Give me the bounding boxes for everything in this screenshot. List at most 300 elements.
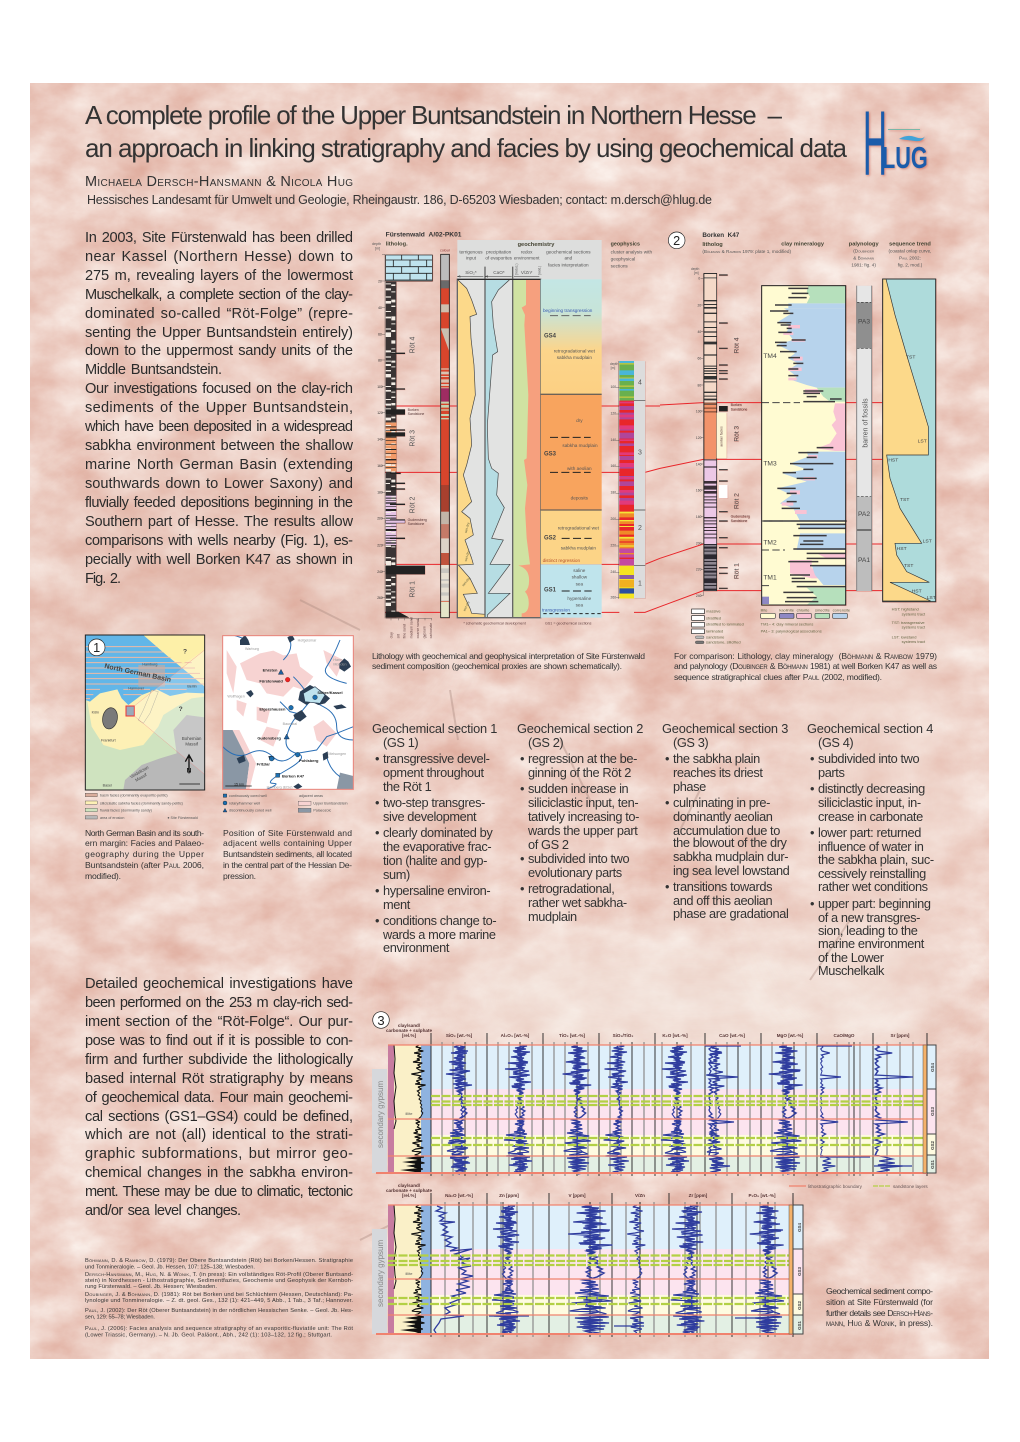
text: geochemical section 1: the Röt 1	[383, 779, 432, 794]
text: geochemical section 1: environment	[383, 940, 450, 955]
chart: geochemical logs, lower row	[372, 1183, 803, 1337]
facies interpretation column: beginning transgression	[543, 308, 593, 313]
lithology column: Röt 2	[734, 493, 741, 509]
section strip: GS1–GS4: GS3	[930, 1106, 935, 1116]
figure 1: palaeogeography map: Basel	[103, 784, 112, 788]
text: geochemical section 2: rather wet sabkha-	[528, 895, 627, 910]
caption: map 2	[223, 828, 352, 881]
geochemistry chart	[457, 240, 602, 625]
text: geochemical section 2: •	[520, 881, 524, 896]
boundary lines	[376, 1205, 793, 1334]
intro text block: dominated so-called “Röt-Folge” (repre-	[85, 306, 353, 322]
facies interpretation column: GS4	[544, 333, 557, 339]
heading: depth	[372, 242, 381, 246]
figure 1: palaeogeography map: North German Basin	[104, 663, 172, 684]
geochemistry chart: V/Zn*	[521, 270, 533, 275]
intro text block: near Kassel (Northern Hesse) down to	[85, 249, 353, 265]
lithology column: Borken	[731, 403, 742, 407]
caption: Borken K47	[674, 651, 937, 682]
column headings: V/Zn	[635, 1193, 645, 1198]
facies interpretation column: saline	[573, 568, 586, 573]
depth axis: 180	[696, 515, 702, 519]
heading: palynology	[849, 241, 879, 247]
column headings: carbonate + sulphate	[386, 1028, 432, 1033]
caption: map 1: modified).	[85, 871, 121, 881]
section strip: GS1–GS4	[789, 1205, 803, 1334]
heading: Fürstenwald A/02-PK01	[386, 232, 462, 239]
caption: geochemical sediment composition: sition at Site Fürstenwald (for	[826, 1297, 933, 1307]
column headings: TiO₂ [wt.-%]	[559, 1033, 585, 1038]
depth axis: 120	[696, 436, 702, 440]
legend: lithology and minerals: TST: transgressive	[892, 620, 925, 625]
text: geochemical section 1: transgressive devel-	[383, 751, 490, 766]
geophysics cluster column: 2	[638, 525, 642, 532]
facies interpretation column: GS2	[544, 535, 557, 541]
grid lines	[445, 1202, 775, 1337]
lithology column	[704, 273, 750, 591]
heading	[372, 232, 462, 252]
figure 1: well location map: 15 km	[234, 782, 244, 786]
legend: map 2: continuously cored well	[229, 794, 267, 798]
section strip: GS1–GS4: GS1	[930, 1159, 935, 1169]
clay mineralogy chart	[762, 286, 847, 605]
references: Doubinger, J. & Böhmann, D. (1981): Röt bei Borken und bei Schlüchtern (Hessen, Deutschland): Pa-	[85, 1292, 353, 1298]
legend: map 2: rotary/hammer well	[229, 801, 260, 805]
depth axis: 140	[377, 438, 383, 442]
palynology column: barren of fossils	[862, 398, 869, 448]
text: geochemical section 3: culminating in pre-	[673, 795, 770, 810]
intro text block	[84, 230, 353, 587]
legend: map 2: discontinuously cored well	[229, 809, 272, 813]
text: geochemical section 4: rather wet conditions	[818, 879, 928, 894]
sequence trend chart: HST	[897, 546, 907, 552]
text: geochemical section 1: •	[375, 883, 379, 898]
curves	[446, 1045, 913, 1174]
text: geochemical section 4: •	[810, 896, 814, 911]
background bands	[431, 1045, 927, 1173]
lithology labels: coarse sand	[416, 619, 420, 638]
figure 1: well location map: Pohlsberg	[299, 758, 319, 763]
column headings: SiO₂/TiO₂	[613, 1033, 633, 1038]
well symbols	[269, 669, 317, 777]
text: geochemical section 2: (GS 2)	[528, 735, 563, 750]
geochemistry chart: terrigenous	[459, 250, 483, 255]
column headings: [rel.%]	[402, 1193, 416, 1198]
text: geochemical section 1: ment	[383, 897, 411, 912]
figure 1: well location map: Söhre/Kassel	[317, 690, 343, 695]
sequence trend chart: HST	[888, 457, 898, 463]
sequence trend chart: TST	[900, 497, 909, 503]
text: geochemical section 4: of a new transgres-	[818, 910, 920, 925]
geochemistry chart: redox	[521, 250, 533, 255]
section strip: GS1–GS4	[923, 1045, 936, 1173]
lithology labels: Sandstone	[408, 522, 424, 526]
geochemistry chart: wet-dry	[462, 600, 471, 612]
depth axis: 160	[696, 488, 702, 492]
lithology column: Sandstone	[731, 519, 747, 523]
text: geochemical section 4: upper part: beginning	[818, 896, 931, 911]
figure 1: palaeogeography map: ?	[179, 706, 183, 713]
depth axis: 60	[697, 357, 701, 361]
logo: HLUG: H	[863, 91, 887, 195]
text: geochemical section 2	[517, 721, 643, 924]
text: geochemical section 2: of GS 2	[528, 837, 569, 852]
intro text block: Fig. 2.	[85, 571, 121, 587]
column headings	[386, 1183, 776, 1198]
section strip: GS1–GS4: GS1	[797, 1320, 802, 1330]
figure 1: palaeogeography map: Massif	[185, 741, 199, 746]
side label: secondary gypsum: secondary gypsum	[376, 1240, 385, 1307]
side label: secondary gypsum: secondary gypsum	[376, 1081, 385, 1148]
depth axis: 260	[377, 596, 383, 600]
intro text block: Middle Buntsandstein.	[85, 362, 222, 378]
sequence trend chart: LST	[927, 595, 936, 601]
geophysics cluster column: 200	[611, 517, 616, 521]
text: geochemical section 1: Geochemical section 1	[372, 721, 497, 736]
text: geochemical section 3: •	[665, 751, 669, 766]
geophysics cluster column: geophysical	[611, 257, 635, 262]
affiliation and contact: Hessisches Landesamt für Umwelt und Geologie, Rheingaustr. 186, D-65203 Wiesbaden; contact: m.dersch@hlug.de	[87, 193, 712, 207]
column headings: carbonate + sulphate	[386, 1188, 432, 1193]
geophysics cluster column: 220	[611, 543, 616, 547]
heading: colour	[440, 248, 451, 252]
column headings: Na₂O [wt.-%]	[445, 1193, 473, 1198]
title	[85, 100, 848, 163]
figure: Fürstenwald profile	[372, 232, 660, 638]
figure 1: well location map: Hofgeismar	[298, 639, 317, 643]
clay mineralogy chart: TM3	[763, 460, 777, 467]
text: geochemical section 2: Geochemical section 2	[517, 721, 643, 736]
depth axis: 100	[377, 385, 383, 389]
geochemistry chart: environment	[514, 256, 540, 261]
intro text block: sediments of the Upper Buntsandstein,	[85, 400, 353, 416]
clay mineralogy chart: TM2	[763, 540, 777, 547]
figure 1: well location map: Wolfhagen	[227, 694, 245, 698]
intro text block: down to the uppermost sandy units of the	[85, 343, 353, 359]
text: geochemical section 2: evolutionary parts	[528, 865, 622, 880]
figure: Borken K47 profile	[660, 232, 936, 645]
lithology labels	[386, 337, 433, 638]
depth axis: 0	[698, 277, 700, 281]
second text block: based internal Röt stratigraphy by means	[85, 1071, 353, 1087]
side label: secondary gypsum	[372, 1229, 387, 1334]
figure 1: palaeogeography map: Vindelician	[129, 764, 150, 779]
text: geochemical section 3: phase are gradational	[673, 906, 788, 921]
facies interpretation column: retrogradational wet	[554, 348, 596, 353]
text: geochemical section 3: dominantly aeolian	[673, 809, 773, 824]
text: geochemical section 1: •	[375, 751, 379, 766]
intro text block: 275 m, revealing layers of the lowermost	[85, 268, 353, 284]
sequence trend chart: TST	[906, 354, 915, 360]
references: Paul, J. (2002): Der Röt (Oberer Buntsandstein) in der nördlichen Hessischen Senke. – Geol. Jb. Hes-	[85, 1308, 353, 1314]
chart legend: sandstone layers	[893, 1184, 928, 1189]
legend: lithology and minerals: sandstone	[706, 635, 725, 640]
text: geochemical section 2: ginning of the Röt 2	[528, 765, 631, 780]
facies interpretation column: sabkha mudplain	[561, 546, 596, 551]
legend: lithology and minerals: sandstone, silicified	[706, 640, 741, 645]
caption: map 1: ern margin: Facies and Palaeo-	[85, 838, 204, 848]
heading: fig. 2, mod.)	[898, 262, 923, 267]
legend: map 1: ● Site Fürstenwald	[167, 816, 198, 820]
heading: (Doubinger	[853, 248, 875, 253]
facies interpretation column: hypersaline	[567, 596, 592, 601]
legend: lithology and minerals: LST: lowstand	[892, 634, 916, 639]
references: sen, 129: 55–78; Wiesbaden.	[85, 1314, 155, 1320]
second text block: ment. These may be due to climatic, tectonic	[85, 1184, 353, 1200]
text: geochemical section 1: two-step transgres-	[383, 795, 485, 810]
lithology labels: clay	[389, 632, 393, 638]
column headings: clay/sand/	[398, 1183, 421, 1188]
facies interpretation column: shallow	[572, 575, 588, 580]
text: geochemical section 1	[372, 721, 497, 955]
text: geochemical section 2: sudden increase in	[528, 781, 629, 796]
references: rung Fürstenwald. – Geol. Jb. Hessen; Wiesbaden.	[85, 1284, 217, 1290]
column headings: SiO₂ [wt.-%]	[446, 1033, 473, 1038]
legend: lithology and minerals: systems tract	[902, 639, 926, 644]
sequence trend chart: TST	[904, 563, 913, 569]
lithology labels: Röt 1	[409, 581, 416, 598]
text: geochemical section 4: Geochemical section 4	[807, 721, 933, 736]
text: geochemical section 4: •	[810, 751, 814, 766]
references: Böhmann, D. & Rambow, D. (1979): Der Obere Buntsandstein (Röt) bei Borken/Hessen. Stratigraphie	[85, 1258, 353, 1264]
geochemistry chart: geochemical sections	[546, 250, 591, 255]
text: geochemical section 4: parts	[818, 765, 844, 780]
facies interpretation column: distinct regression	[543, 558, 581, 563]
text: geochemical section 1: •	[375, 795, 379, 810]
text: geochemical section 2: tatively increasing to-	[528, 809, 639, 824]
side label: secondary gypsum	[372, 1069, 387, 1173]
geochemistry chart: CaO*	[493, 270, 505, 275]
legend: lithology and minerals: laminated	[706, 628, 723, 633]
geophysics cluster column: 4	[638, 380, 642, 387]
caption: map 2: Buntsandstein sediments, all located	[223, 849, 352, 859]
depth axis: 80	[697, 383, 701, 387]
lithology labels: medium sand	[409, 617, 413, 638]
geophysics cluster column: 1	[638, 580, 642, 587]
text: geochemical section 3: ing sea level lowstand	[673, 863, 790, 878]
references: stein) in Nordhessen - Lithostratigraphie, Sedimentfazies, Geochemie und Geophysik der Kernboh-	[85, 1278, 353, 1284]
depth axis: 200	[377, 517, 383, 521]
heading: litholog.	[386, 242, 408, 248]
text: geochemical section 3: Geochemical section 3	[662, 721, 788, 736]
figure 1: palaeogeography map: Massif	[134, 772, 148, 783]
palynology column: PA3	[858, 319, 870, 326]
depth axis: 200	[696, 542, 702, 546]
text: geochemical section 4: cessively reinstalling	[818, 866, 926, 881]
text: geochemical section 4: crease in carbonate	[818, 809, 923, 824]
lithology column	[386, 255, 432, 618]
text: geochemical section 1: conditions change to-	[383, 913, 496, 928]
figure 1: palaeogeography map: ?	[183, 648, 187, 655]
figure 1: well location map: Warburg	[245, 647, 259, 651]
text: geochemical section 4: Muschelkalk	[818, 963, 885, 978]
heading	[702, 232, 931, 267]
legend: map 1: siliciclastic sabkha facies (dominantly sandy-pelitic)	[100, 801, 183, 805]
depth axis: 40	[697, 330, 701, 334]
palynology column: PA2	[858, 511, 870, 518]
stacked composition column: illite	[406, 1111, 413, 1116]
text: geochemical section 4: lower part: returned	[818, 825, 921, 840]
text: geochemical section 3: •	[665, 879, 669, 894]
lithology column: Sandstone	[731, 408, 747, 412]
figure 1: palaeogeography map	[84, 634, 206, 820]
caption: geochemical sediment composition: Geochemical sediment compo-	[826, 1286, 933, 1296]
lithology labels: Sandstone	[408, 412, 424, 416]
text: geochemical section 1: wards a more marine	[382, 927, 496, 942]
column headings: K₂O [wt.-%]	[662, 1033, 688, 1038]
geochemistry chart: (reduc.)	[514, 264, 518, 275]
geophysics cluster column: cluster analysis with	[611, 250, 652, 255]
text: geochemical section 4: marine environment	[818, 936, 925, 951]
text: geochemical section 4: subdivided into two	[818, 751, 920, 766]
text: geochemical section 4: siliciclastic input, in-	[818, 795, 921, 810]
legend: map 2: Palaeozoic	[313, 809, 331, 813]
figure 1: palaeogeography map: Hamburg	[142, 663, 157, 667]
caption: Fürstenwald profile: Lithology with geochemical and geophysical interpretation of Site Fürstenwald	[372, 651, 645, 661]
figure 1: well location map: Ehrsten	[263, 668, 278, 673]
lithology column: Röt 3	[734, 425, 741, 442]
figure 1: palaeogeography map: N	[187, 768, 192, 775]
geophysics cluster column: sections	[611, 264, 628, 269]
depth axis	[691, 267, 703, 598]
clay mineralogy chart: TM4	[763, 353, 777, 360]
column headings	[386, 1023, 910, 1038]
second text block	[84, 976, 354, 1219]
legend: lithology and minerals: massive	[706, 609, 721, 614]
lithology labels: carbonate	[429, 623, 433, 638]
heading: 1981: fig. 4)	[851, 262, 876, 267]
geochemistry chart: input	[466, 256, 477, 261]
geochemistry chart: wet-dry	[464, 522, 471, 534]
geochemistry chart: geochemistry	[518, 242, 555, 248]
correlation lines	[385, 406, 660, 612]
geophysics cluster column: 160	[611, 464, 616, 468]
caption: geochemical sediment composition: mann, Hug & Wonik, in press).	[826, 1318, 933, 1328]
geochemistry chart: (oxid.)	[538, 266, 542, 275]
caption: map 2: Position of Site Fürstenwald and	[223, 828, 352, 838]
geochemistry chart: SiO₂*	[465, 270, 477, 275]
figure 1: palaeogeography map: Frankfurt	[101, 739, 116, 743]
depth axis: 220	[696, 568, 702, 572]
intro text block: Muschelkalk, a complete section of the clay-	[85, 287, 353, 303]
intro text block: pecially with well Borken K47 as shown in	[85, 552, 353, 568]
text: geochemical section 1: sum)	[383, 867, 410, 882]
caption: Fürstenwald profile: sediment composition (geochemical proxies are shown schematically).	[372, 661, 622, 671]
clay mineralogy chart: TM1	[763, 574, 777, 581]
text: geochemical section 3: phase	[673, 779, 706, 794]
figure 1: palaeogeography map: Hannover	[128, 686, 145, 690]
logo: HLUG	[863, 91, 928, 195]
heading: clay mineralogy	[781, 241, 825, 247]
heading: Paul 2002:	[899, 255, 921, 260]
depth axis: 40	[378, 306, 382, 310]
depth axis: 240	[696, 594, 702, 598]
sequence trend chart: HST	[912, 588, 922, 594]
authors: Michaela Dersch-Hansmann & Nicola Hug	[85, 174, 353, 190]
text: geochemical section 3: sabkha mudplain dur-	[673, 849, 788, 864]
geochemistry chart: wet-dry	[464, 550, 471, 562]
legend: lithology and minerals: TM1– 4: clay mineral sections	[761, 622, 813, 627]
caption: map 2: in the central part of the Hessian De-	[223, 860, 352, 870]
second text block: chemical changes in the sabkha environ-	[85, 1165, 353, 1181]
text: geochemical section 2: mudplain	[528, 909, 577, 924]
legend: lithology and minerals: illite	[761, 607, 768, 612]
section strip: GS1–GS4: GS4	[797, 1222, 802, 1232]
intro text block: comparisons with wells nearby (Fig. 1), es-	[85, 533, 353, 549]
text: geochemical section 4: influence of water in	[818, 839, 924, 854]
geochemistry chart: wet-dry	[461, 576, 471, 587]
text: geochemical section 3: (GS 3)	[673, 735, 708, 750]
stacked composition column	[388, 1045, 431, 1173]
section strip: GS1–GS4: GS2	[930, 1140, 935, 1150]
geophysics cluster column: 120	[611, 411, 616, 415]
caption: map 1	[85, 828, 204, 881]
geophysics cluster column: depth	[610, 362, 618, 366]
lithology labels: Röt 2	[409, 497, 416, 513]
section strip: GS1–GS4: GS4	[930, 1062, 935, 1072]
depth axis: 160	[377, 464, 383, 468]
second text block: graphic subformations, but mirror geo-	[85, 1146, 353, 1162]
text: geochemical section 3: and off this aeolian	[673, 893, 772, 908]
intro text block: In 2003, Site Fürstenwald has been drilled	[85, 230, 353, 246]
text: geochemical section 1: •	[375, 825, 379, 840]
text: geochemical section 4: the sabkha plain, suc-	[818, 852, 934, 867]
text: geochemical section 4: (GS 4)	[818, 735, 853, 750]
section strip: GS1–GS4: GS2	[797, 1300, 802, 1310]
second text block: been performed on the 253 m clay-rich sed-	[85, 995, 353, 1011]
palynology column	[857, 286, 872, 591]
facies interpretation column: deposits	[571, 496, 589, 501]
figure 1: palaeogeography map: Köln	[92, 710, 99, 714]
geophysics cluster column: [m]	[611, 366, 615, 370]
legend: lithology and minerals: smectite	[815, 607, 831, 612]
caption: map 1: Buntsandstein (after Paul 2006,	[85, 860, 204, 870]
second text block: pose was to find out if it is possible to con-	[85, 1033, 353, 1049]
intro text block: Our investigations focused on the clay-rich	[85, 381, 353, 397]
figure number: 2	[673, 234, 680, 248]
lithology column: Gudensberg	[731, 515, 750, 519]
lithology column: aeolian facies	[720, 426, 724, 447]
text: geochemical section 3: accumulation due to	[673, 823, 780, 838]
depth axis: 240	[377, 570, 383, 574]
geochemistry chart: precipitation	[486, 250, 512, 255]
depth axis: 120	[377, 411, 383, 415]
heading: litholog	[702, 242, 723, 248]
geophysics cluster column: 180	[611, 491, 616, 495]
lithology labels: Röt 3	[409, 430, 416, 447]
lithology labels: Gudensberg	[408, 518, 427, 522]
geophysics cluster column: 260	[611, 596, 616, 600]
references: und Tonmineralogie. – Geol. Jb. Hessen, 107: 125–138; Wiesbaden.	[85, 1264, 255, 1270]
intro text block: senting the Upper Buntsandstein entirely)	[85, 325, 353, 341]
text: geochemical section 1: •	[375, 913, 379, 928]
depth axis: 20	[697, 303, 701, 307]
text: geochemical section 1: clearly dominated by	[383, 825, 493, 840]
column headings: Zn [ppm]	[499, 1193, 519, 1198]
legend: map 2: adjacent areas	[299, 794, 323, 798]
column headings: [rel.%]	[402, 1033, 416, 1038]
figure 1: well location map: Fürstenwald	[259, 679, 283, 684]
depth axis: 180	[377, 491, 383, 495]
text: geochemical section 1: tion (halite and gyp-	[383, 853, 487, 868]
figure 1: well location map: Fritzlar	[257, 761, 270, 766]
legend: lithology and minerals: corrensite	[833, 607, 851, 612]
column headings: CaO [wt.-%]	[719, 1033, 745, 1038]
palynology column: PA1	[858, 557, 870, 564]
second text block: iment section of the “Röt-Folge“. Our pur-	[85, 1014, 353, 1030]
figure 1: well location map: Elgershausen	[259, 706, 286, 711]
legend: map 1: basin facies (dominantly evaporitic-pelitic)	[100, 794, 168, 798]
